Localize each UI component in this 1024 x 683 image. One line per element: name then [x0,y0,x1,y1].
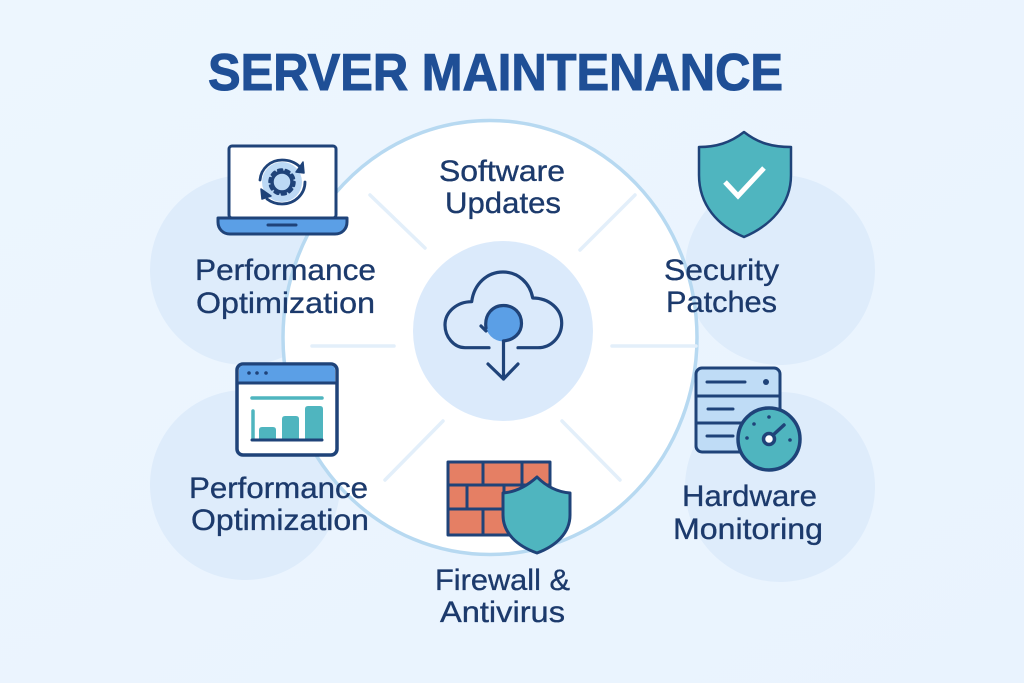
icon: cloud download [445,272,562,379]
hub circle [413,241,593,421]
title: SERVER MAINTENANCE [208,44,783,102]
label: hardware monitoring: Hardware [682,480,817,513]
icon: chart window [237,364,337,455]
label: performance optimization bottom [189,472,369,537]
central white circle [283,120,697,554]
icon: laptop with sync gear [218,146,347,234]
label: software updates: Updates [445,187,561,220]
label: performance optimization top: Optimization [196,287,375,320]
label: firewall and antivirus: Firewall & [435,564,570,597]
label: security patches: Patches [666,286,777,319]
label: software updates: Software [439,155,565,188]
label: performance optimization top [195,254,376,320]
icon: server with gauge [696,368,800,470]
central hub: cloud download [413,241,593,421]
icon: security shield with check [699,132,791,237]
label: performance optimization bottom: Optimization [191,504,369,537]
label: firewall and antivirus: Antivirus [440,596,565,629]
label: hardware monitoring [673,480,823,546]
label: hardware monitoring: Monitoring [673,513,823,546]
label: firewall and antivirus [435,564,570,629]
label: security patches: Security [664,254,779,287]
label: performance optimization bottom: Performance [189,472,368,505]
background circles [150,175,875,582]
label: performance optimization top: Performance [195,254,376,287]
label: security patches [664,254,779,319]
icon: firewall with shield [448,462,570,553]
label: software updates [439,155,565,220]
